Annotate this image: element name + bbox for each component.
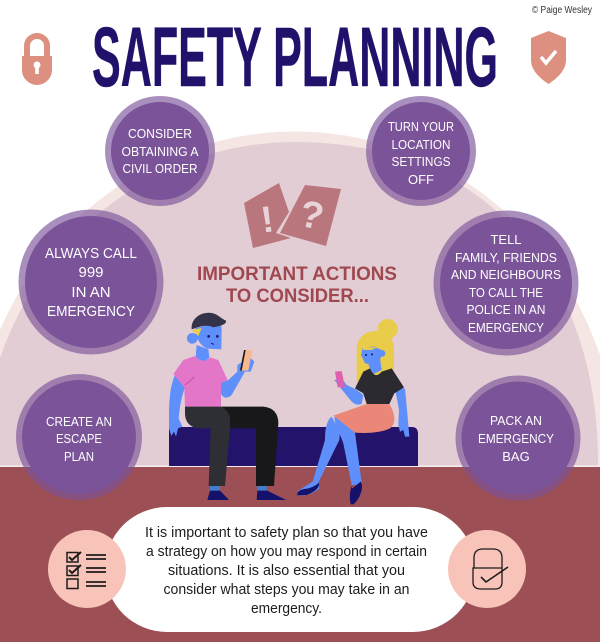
heading: important actions bbox=[197, 264, 397, 307]
action circle: call 999: ALWAYS CALL bbox=[45, 245, 137, 262]
info text: It is important to safety plan so that you have bbox=[145, 524, 428, 541]
action circle: tell others bbox=[434, 210, 578, 356]
info text: emergency. bbox=[251, 600, 322, 617]
icon: shield with check bbox=[531, 31, 566, 84]
action circle: civil order bbox=[105, 96, 215, 206]
action circle: call 999: 999 bbox=[78, 264, 104, 281]
heading: important actions: IMPORTANT ACTIONS bbox=[197, 264, 397, 285]
action circle: escape plan: CREATE AN bbox=[46, 414, 112, 429]
illustration: man and woman on sofa bbox=[169, 313, 409, 505]
info text: a strategy on how you may respond in certain bbox=[146, 543, 427, 560]
action circle: tell others: AND NEIGHBOURS bbox=[451, 267, 561, 282]
sofa bbox=[169, 427, 418, 466]
icon: checklist bbox=[48, 530, 126, 608]
action circle: emergency bag bbox=[456, 376, 580, 500]
action circle: location settings: OFF bbox=[408, 172, 434, 187]
action circle: civil order: CONSIDER bbox=[128, 126, 192, 141]
action circle: emergency bag: PACK AN bbox=[490, 413, 542, 428]
heading: important actions: TO CONSIDER... bbox=[226, 286, 369, 307]
man bbox=[169, 313, 286, 500]
action circle: escape plan: ESCAPE bbox=[56, 431, 102, 446]
action circle: call 999: IN AN bbox=[71, 284, 111, 301]
action circle: call 999 bbox=[18, 210, 164, 354]
question card: ? bbox=[296, 193, 327, 239]
action circle: escape plan bbox=[16, 374, 142, 500]
action circle: call 999: EMERGENCY bbox=[47, 303, 135, 320]
background arch: outer bbox=[0, 132, 600, 467]
woman bbox=[297, 319, 409, 505]
info panel bbox=[105, 507, 475, 632]
action circle: emergency bag: EMERGENCY bbox=[478, 431, 554, 446]
info text: consider what steps you may take in an bbox=[164, 581, 410, 598]
action circle: civil order: OBTAINING A bbox=[122, 144, 199, 159]
action circle: emergency bag: BAG bbox=[502, 449, 530, 464]
action circle: location settings: LOCATION bbox=[392, 137, 450, 152]
action circle: tell others: FAMILY, FRIENDS bbox=[455, 250, 557, 265]
action circle: escape plan: PLAN bbox=[64, 449, 94, 464]
info text bbox=[145, 524, 428, 617]
exclamation card: ! bbox=[258, 198, 276, 241]
action circle: tell others: TELL bbox=[490, 232, 522, 247]
info text: situations. It is also essential that you bbox=[168, 562, 405, 579]
icon: lock with check bbox=[448, 530, 526, 608]
action circle: tell others: POLICE IN AN bbox=[466, 302, 546, 317]
action circle: civil order: CIVIL ORDER bbox=[122, 161, 198, 176]
action circle: tell others: TO CALL THE bbox=[469, 285, 543, 300]
icon: padlock bbox=[22, 36, 52, 85]
icon: warning and question cards bbox=[244, 183, 341, 248]
background arch: inner bbox=[0, 142, 598, 467]
action circle: location settings: TURN YOUR bbox=[388, 119, 454, 134]
action circle: location settings: SETTINGS bbox=[392, 154, 451, 169]
action circle: tell others: EMERGENCY bbox=[468, 320, 544, 335]
action circle: location settings bbox=[366, 96, 476, 206]
ground band bbox=[0, 467, 600, 642]
